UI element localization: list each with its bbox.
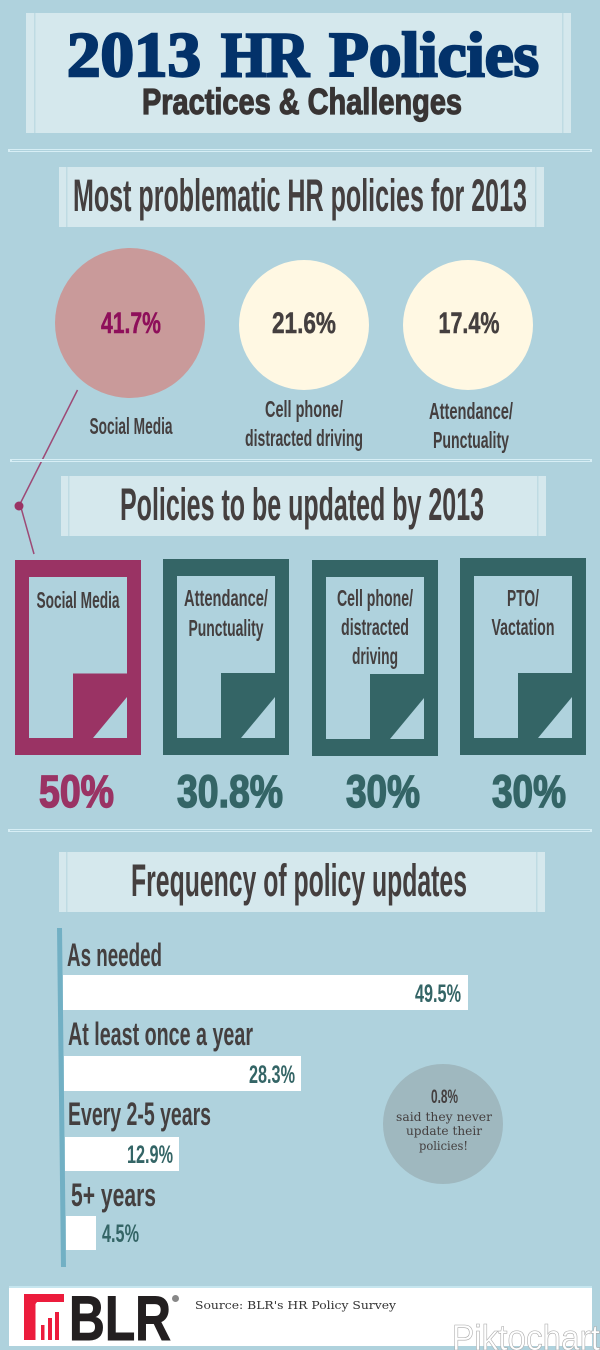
bar: at least once a year: At least once a year <box>68 1016 253 1052</box>
icon: BLR logo mark <box>24 1294 64 1340</box>
callout: 0.8% never update: said they never <box>396 1110 492 1124</box>
callout: 0.8% never update <box>383 1064 503 1184</box>
stat: 30% cell phone: 30% <box>346 766 420 817</box>
circle: cell phone 21.6%: distracted driving <box>245 425 363 451</box>
document: attendance <box>163 559 289 755</box>
title: HR <box>221 20 310 90</box>
axis line <box>57 928 66 1267</box>
callout: 0.8% never update: policies! <box>419 1139 468 1153</box>
circle: attendance 17.4%: Attendance/ <box>429 398 513 424</box>
document: attendance: Punctuality <box>188 615 264 641</box>
bar: every 2-5 years: 12.9% <box>127 1141 173 1169</box>
source text: Source: BLR's HR Policy Survey <box>195 1298 397 1312</box>
circle: cell phone 21.6% <box>239 260 369 451</box>
document: social media: Social Media <box>36 587 120 613</box>
circle: attendance 17.4%: 17.4% <box>438 307 500 340</box>
bar: at least once a year: 28.3% <box>249 1061 295 1089</box>
connector line <box>14 390 78 554</box>
title <box>67 20 539 90</box>
bar: every 2-5 years <box>65 1096 211 1171</box>
document: attendance: Attendance/ <box>184 585 268 611</box>
document: cell phone: distracted <box>341 614 409 640</box>
circle: cell phone 21.6%: 21.6% <box>272 307 336 340</box>
callout: 0.8% never update: 0.8% <box>431 1087 458 1108</box>
bar: every 2-5 years: Every 2-5 years <box>68 1096 211 1132</box>
callout: 0.8% never update: update their <box>406 1124 482 1138</box>
circle: social media 41.7%: 41.7% <box>101 307 161 340</box>
stat: 30.8%: 30.8% <box>177 766 283 817</box>
document: social media <box>15 560 141 755</box>
circle: social media 41.7% <box>55 248 205 439</box>
bar: as needed <box>63 937 468 1010</box>
bar: 5+ years: 4.5% <box>102 1220 139 1248</box>
bar: at least once a year <box>64 1016 301 1091</box>
document: PTO: PTO/ <box>507 585 539 611</box>
subtitle: Practices & Challenges <box>142 81 462 122</box>
circle: attendance 17.4%: Punctuality <box>433 427 509 453</box>
circle: cell phone 21.6%: Cell phone/ <box>265 396 343 422</box>
circle: social media 41.7%: Social Media <box>90 413 173 439</box>
circle: attendance 17.4% <box>403 260 533 453</box>
bar: 5+ years <box>66 1177 156 1250</box>
stat: 30% PTO: 30% <box>492 766 566 817</box>
document: cell phone: driving <box>352 643 398 669</box>
document: PTO <box>460 558 586 755</box>
title banner <box>26 13 571 133</box>
document: PTO: Vactation <box>492 614 554 640</box>
bar: as needed: 49.5% <box>415 980 461 1008</box>
document: cell phone: Cell phone/ <box>337 585 413 611</box>
footer <box>9 1284 592 1350</box>
document: cell phone <box>312 560 438 756</box>
panel: frequency heading <box>59 852 545 912</box>
bar: as needed: As needed <box>67 937 162 973</box>
bar: 5+ years: 5+ years <box>71 1177 156 1213</box>
stat: 50%: 50% <box>39 766 114 817</box>
title: Policies <box>329 20 539 90</box>
panel: policies to be updated heading <box>61 476 546 536</box>
title: 2013 <box>67 20 201 90</box>
